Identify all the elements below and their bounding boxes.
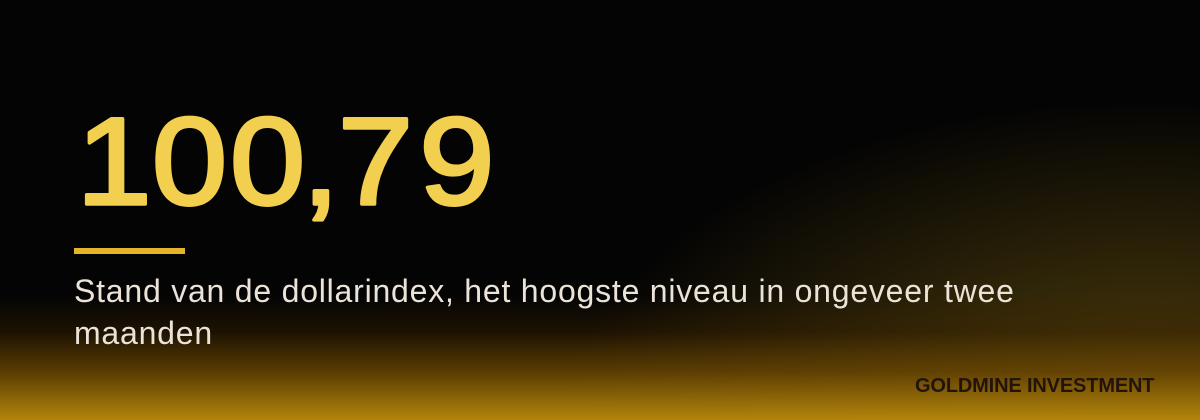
brand label: GOLDMINE INVESTMENT [915, 375, 1154, 397]
description text: Stand van de dollarindex, het hoogste niveau in ongeveer twee [74, 273, 1015, 309]
big number: 100,79 [77, 93, 495, 231]
accent rule [74, 248, 185, 254]
description text [74, 273, 1015, 351]
description text: maanden [74, 315, 213, 351]
